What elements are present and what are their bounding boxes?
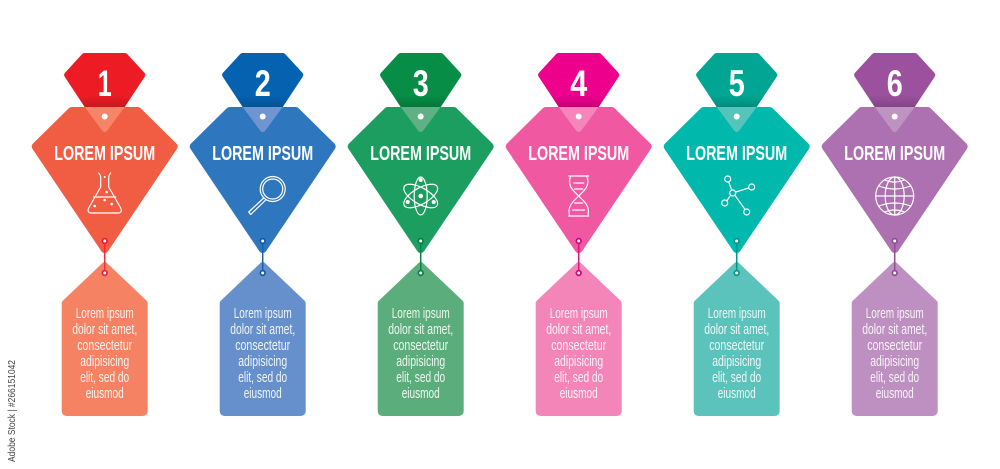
body text: elit, sed do [712,370,761,386]
overlap [559,107,599,132]
tag [697,265,777,413]
eyelets [576,238,582,276]
hole [734,114,740,120]
heading: LOREM IPSUM [370,143,471,165]
hole [418,114,424,120]
body text: Lorem ipsum [234,306,292,322]
body text: eiusmod [402,386,440,402]
number gem 4 [542,56,616,131]
body text: dolor sit amet, [704,322,769,338]
body text: Lorem ipsum [76,306,134,322]
hole [576,114,582,120]
heading: LOREM IPSUM [844,143,945,165]
overlap [243,107,283,132]
main gem [352,111,490,249]
body text: consectetur [77,338,132,354]
number gem 3 [384,56,458,131]
column 4 [510,56,648,413]
number gem 3: 3 [413,63,429,104]
body text: dolor sit amet, [862,322,927,338]
column 2 [194,56,332,413]
eyelets [734,238,740,276]
body text: adipisicing [712,354,761,370]
tag [223,265,303,413]
tag [381,265,461,413]
tag [855,265,935,413]
overlap [875,107,915,132]
stock id caption: Adobe Stock | #266151042 [7,360,18,462]
icon: flask [88,173,121,213]
body text [704,306,769,402]
number gem 1 [68,56,142,131]
body text: adipisicing [238,354,287,370]
body text: eiusmod [560,386,598,402]
eyelets [102,238,108,276]
body text: eiusmod [718,386,756,402]
body text: Lorem ipsum [866,306,924,322]
body text: Lorem ipsum [550,306,608,322]
overlap [85,107,125,132]
body text [862,306,927,402]
body text: Lorem ipsum [708,306,766,322]
body text [388,306,453,402]
body text: adipisicing [554,354,603,370]
body text [230,306,295,402]
number gem 4: 4 [570,63,588,104]
heading: LOREM IPSUM [212,143,313,165]
main gem [510,111,648,249]
body text: consectetur [867,338,922,354]
body text [72,306,137,402]
body text: adipisicing [870,354,919,370]
number gem 5: 5 [729,63,745,104]
body text: elit, sed do [238,370,287,386]
body text: dolor sit amet, [388,322,453,338]
heading: LOREM IPSUM [686,143,787,165]
body text: elit, sed do [870,370,919,386]
icon: atom [400,177,441,215]
overlap [401,107,441,132]
column 3 [352,56,490,413]
body text: adipisicing [80,354,129,370]
hole [260,114,266,120]
number gem 2 [226,56,300,131]
connector [736,241,738,273]
body text: consectetur [393,338,448,354]
icon: magnifier [249,176,285,214]
main gem [36,111,174,249]
number gem 6 [858,56,932,131]
heading: LOREM IPSUM [54,143,155,165]
body text: consectetur [551,338,606,354]
number gem 5 [700,56,774,131]
column 5 [668,56,806,413]
body text: adipisicing [396,354,445,370]
icon: globe [876,177,914,215]
icon: dna [569,176,589,216]
body text: dolor sit amet, [72,322,137,338]
eyelets [892,238,898,276]
body text [546,306,611,402]
hole [892,114,898,120]
hole [102,114,108,120]
body text: elit, sed do [396,370,445,386]
body text: dolor sit amet, [230,322,295,338]
connector [262,241,264,273]
column 6 [826,56,964,413]
body text: eiusmod [244,386,282,402]
connector [578,241,580,273]
main gem [194,111,332,249]
overlap [717,107,757,132]
body text: consectetur [709,338,764,354]
heading: LOREM IPSUM [528,143,629,165]
connector [894,241,896,273]
body text: consectetur [235,338,290,354]
tag [65,265,145,413]
eyelets [260,238,266,276]
number gem 1: 1 [98,63,112,104]
eyelets [418,238,424,276]
number gem 2: 2 [255,63,271,104]
body text: elit, sed do [554,370,603,386]
body text: Lorem ipsum [392,306,450,322]
tag [539,265,619,413]
main gem [826,111,964,249]
connector [104,241,106,273]
icon: network [722,176,755,215]
number gem 6: 6 [887,63,903,104]
body text: elit, sed do [80,370,129,386]
body text: eiusmod [876,386,914,402]
connector [420,241,422,273]
column 1 [36,56,174,413]
body text: dolor sit amet, [546,322,611,338]
body text: eiusmod [86,386,124,402]
main gem [668,111,806,249]
